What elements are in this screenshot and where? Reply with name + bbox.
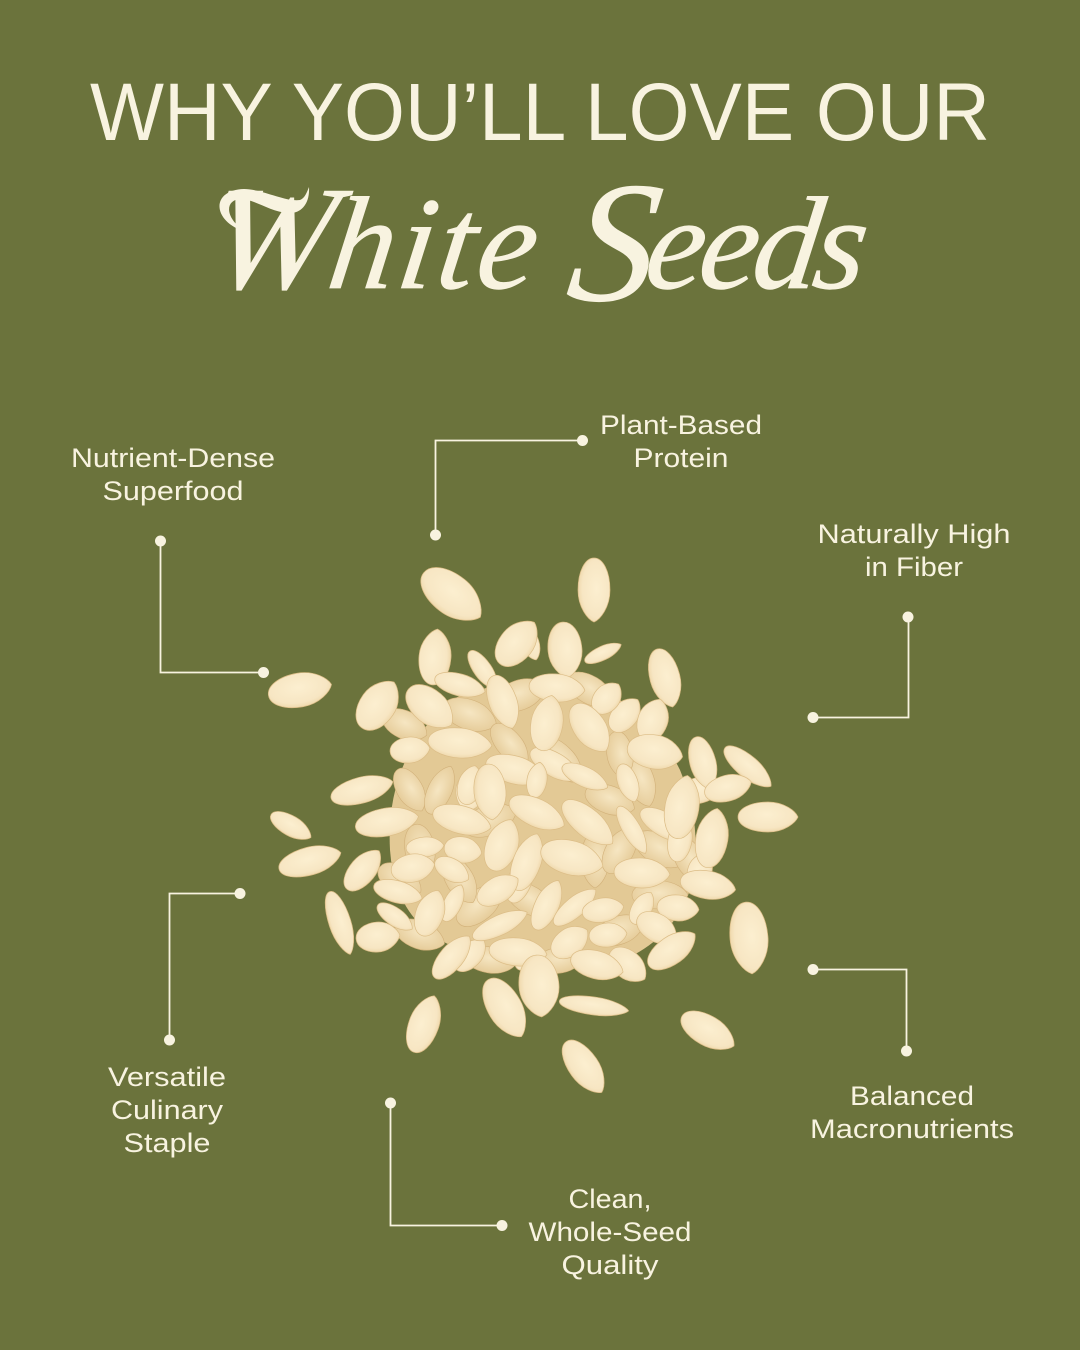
script title: white seeds	[198, 148, 878, 338]
connector: balanced	[808, 964, 912, 1056]
label: plant-based protein: Plant-Based	[600, 410, 762, 440]
label: clean whole-seed quality	[528, 1184, 692, 1280]
script title: white seeds: hite	[321, 171, 551, 317]
label: nutrient-dense superfood	[71, 443, 275, 506]
connector: fiber	[808, 612, 914, 723]
label: versatile culinary staple: Staple	[124, 1128, 210, 1158]
seeds: front pile	[328, 611, 738, 986]
seeds: scattered	[266, 557, 798, 1101]
label: clean whole-seed quality: Whole-Seed	[528, 1217, 692, 1247]
label: balanced macronutrients	[810, 1081, 1014, 1144]
label: nutrient-dense superfood: Nutrient-Dense	[71, 443, 275, 473]
label: plant-based protein: Protein	[634, 443, 728, 473]
label: balanced macronutrients: Macronutrients	[810, 1114, 1014, 1144]
label: versatile culinary staple: Versatile	[108, 1062, 226, 1092]
label: nutrient-dense superfood: Superfood	[102, 476, 244, 506]
script title: white seeds: W	[200, 157, 359, 321]
label: plant-based protein	[600, 410, 762, 473]
label: clean whole-seed quality: Quality	[562, 1250, 659, 1280]
script title: white seeds: eeds	[638, 171, 874, 317]
connector: versatile	[164, 888, 246, 1046]
connector: plant-based	[430, 435, 588, 540]
label: versatile culinary staple: Culinary	[111, 1095, 224, 1125]
title: why you'll love our: WHY YOU’LL LOVE OUR	[90, 67, 990, 158]
label: versatile culinary staple	[108, 1062, 226, 1158]
label: naturally high in fiber	[818, 519, 1010, 582]
connector: nutrient-dense	[155, 536, 269, 678]
label: naturally high in fiber: Naturally High	[818, 519, 1010, 549]
script title: white seeds: S	[559, 148, 672, 338]
label: balanced macronutrients: Balanced	[850, 1081, 974, 1111]
label: clean whole-seed quality: Clean,	[568, 1184, 652, 1214]
connector: clean	[385, 1098, 508, 1231]
illustration: sesame seed pile	[266, 557, 798, 1101]
label: naturally high in fiber: in Fiber	[865, 552, 963, 582]
